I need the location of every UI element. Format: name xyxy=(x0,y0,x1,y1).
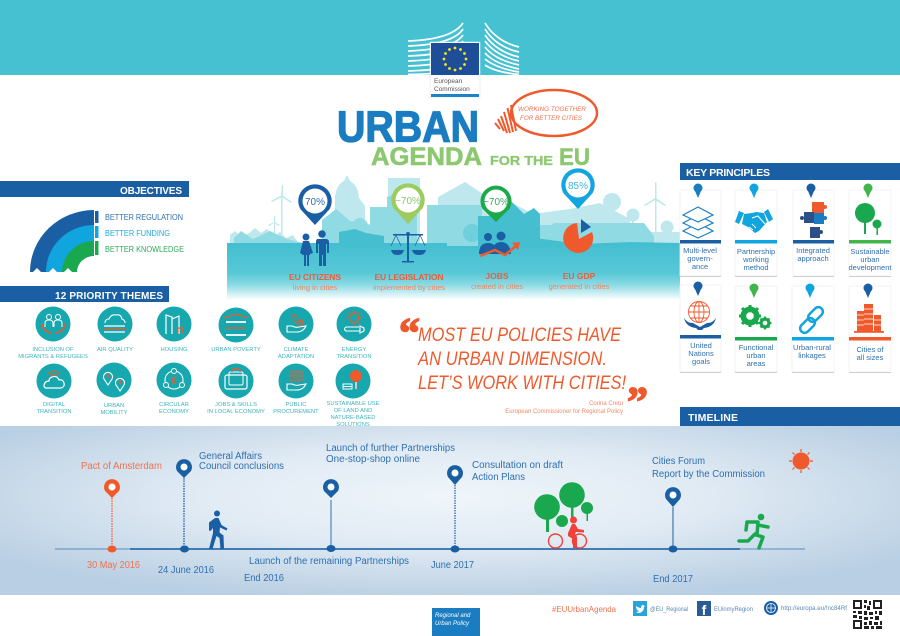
footer: hashtag: #EUUrbanAgenda xyxy=(552,604,616,614)
milestone: further Partnerships: One-stop-shop online xyxy=(326,454,420,465)
milestone: Cities Forum: Cities Forum xyxy=(652,456,705,467)
timeline axis xyxy=(55,548,805,550)
label: TRANSITION xyxy=(336,354,372,360)
label: EU citizens: living in cities xyxy=(293,283,337,292)
label: EU GDP xyxy=(549,271,610,291)
card: multi-level governance xyxy=(680,184,721,276)
footer: website xyxy=(764,601,847,615)
label: ADAPTATION xyxy=(278,354,314,360)
heading: 12 priority themes xyxy=(0,286,169,302)
pin: ~70% legislation: ~70% xyxy=(395,196,421,207)
label: CIRCULAR xyxy=(159,402,189,408)
card: partnership working method xyxy=(735,184,777,276)
label: EU legislation: EU LEGISLATION xyxy=(374,272,444,282)
icon: digital transition xyxy=(36,364,72,398)
title: URBAN xyxy=(337,102,479,152)
attribution xyxy=(505,401,623,415)
card: United Nations goals: United xyxy=(690,341,712,350)
icon: urban poverty xyxy=(218,308,254,342)
card: functional urban areas: Functional xyxy=(739,343,774,352)
European Commission logo: European xyxy=(434,78,463,85)
icon: land use and nature-based solutions xyxy=(336,364,370,398)
chart: objectives rainbow xyxy=(30,210,98,272)
icon: inclusion of migrants and refugees xyxy=(36,306,70,342)
icon: walking person xyxy=(209,510,228,549)
card: United Nations goals xyxy=(680,282,721,372)
European Commission logo: Commission xyxy=(434,86,470,93)
text: objectives list: BETTER FUNDING xyxy=(105,229,170,238)
icon: housing xyxy=(156,306,192,342)
icon: sun xyxy=(789,449,813,473)
label: ECONOMY xyxy=(159,409,189,415)
milestone: Pact of Amsterdam: Pact of Amsterdam xyxy=(81,461,162,472)
icon: jobs and skills xyxy=(218,364,254,398)
card: sustainable urban development: urban xyxy=(860,255,880,264)
card: urban-rural linkages: Urban-rural xyxy=(793,343,831,352)
card: functional urban areas: areas xyxy=(747,359,766,368)
label: ENERGY xyxy=(342,347,366,353)
milestone: further Partnerships: End 2016 xyxy=(244,573,284,584)
icon: circular economy: € xyxy=(171,376,177,387)
card: partnership working method: working xyxy=(742,255,769,264)
callout: working together: FOR BETTER CITIES xyxy=(520,115,582,122)
label: EU citizens: EU CITIZENS xyxy=(289,272,341,282)
card: multi-level governance: Multi-level xyxy=(683,246,717,255)
card: United Nations goals: goals xyxy=(692,357,710,366)
card: cities of all sizes: Cities of xyxy=(856,345,884,354)
label: NATURE-BASED xyxy=(330,415,376,421)
panel: key principles cards xyxy=(680,184,892,372)
pin: 70% citizens xyxy=(298,184,332,225)
panel: timeline background xyxy=(0,426,900,595)
card: functional urban areas: urban xyxy=(746,351,766,360)
label: EU legislation xyxy=(373,272,445,292)
label: EU GDP: generated in cities xyxy=(549,282,610,291)
label: EU legislation: implemented by cities xyxy=(373,283,445,292)
card: cities of all sizes: all sizes xyxy=(857,353,884,362)
card: sustainable urban development: Sustainable xyxy=(850,247,890,256)
icon: closing quote mark: ” xyxy=(627,380,648,426)
milestone: consultation on draft Action Plans: Consultation on draft xyxy=(472,460,563,471)
milestone: Cities Forum xyxy=(652,456,765,585)
footer: website: http://europa.eu/!nc84Rf xyxy=(781,606,847,612)
footer: facebook: EUinmyRegion xyxy=(714,607,753,613)
heading: 12 priority themes: 12 PRIORITY THEMES xyxy=(55,291,163,302)
callout: working together: WORKING TOGETHER xyxy=(518,106,586,113)
card: integrated approach: approach xyxy=(797,254,829,263)
label: jobs: JOBS xyxy=(485,271,509,281)
label: MOBILITY xyxy=(100,410,128,416)
label: EU citizens xyxy=(289,272,341,292)
card: partnership working method: method xyxy=(743,263,769,272)
footer: regional and urban policy box: Regional and xyxy=(435,613,471,619)
milestone: General Affairs Council conclusions: Council conclusions xyxy=(199,461,284,472)
skyline: mid layer xyxy=(234,191,654,250)
icon: Berlaymont building xyxy=(408,23,519,74)
milestone: Pact of Amsterdam xyxy=(81,461,162,571)
icon: opening quote mark: “ xyxy=(399,311,420,357)
heading: timeline: TIMELINE xyxy=(688,412,738,424)
footer: facebook xyxy=(697,601,753,618)
text: objectives list xyxy=(105,213,184,254)
card: partnership working method: Partnership xyxy=(737,247,775,256)
callout: working together xyxy=(495,90,597,136)
icon: energy transition xyxy=(336,306,372,342)
icon: running person xyxy=(739,514,768,548)
icon: trees and cyclist xyxy=(534,482,593,548)
text: objectives list: BETTER KNOWLEDGE xyxy=(105,245,184,254)
label: PUBLIC xyxy=(286,402,306,408)
quote text: AN URBAN DIMENSION. xyxy=(417,349,607,370)
pin: 85% GDP: 85% xyxy=(568,181,588,192)
icon: air quality xyxy=(98,306,132,342)
heading: objectives xyxy=(0,181,189,197)
icon: jobs people and growth arrow xyxy=(479,232,520,256)
attribution: Corina Crețu xyxy=(589,401,623,407)
title: EU xyxy=(559,144,590,171)
heading: key principles xyxy=(680,163,900,180)
panel: city statistics xyxy=(227,168,680,300)
footer: QR code xyxy=(853,600,882,629)
milestone: General Affairs Council conclusions: 24 June 2016 xyxy=(158,565,214,576)
label: TRANSITION xyxy=(36,409,72,415)
milestone: Pact of Amsterdam: 30 May 2016 xyxy=(87,560,140,571)
pin: ~70% jobs: ~70% xyxy=(483,197,509,208)
label: OF LAND AND xyxy=(334,408,372,414)
quote text: MOST EU POLICIES HAVE xyxy=(418,325,621,346)
label: DIGITAL xyxy=(43,402,66,408)
card: cities of all sizes xyxy=(849,284,891,372)
label: HOUSING xyxy=(160,347,188,353)
label: jobs: created in cities xyxy=(471,282,523,291)
card: United Nations goals: Nations xyxy=(688,349,714,358)
skyline: front layer xyxy=(227,200,680,250)
card: multi-level governance: ance xyxy=(692,262,708,271)
icon: urban mobility xyxy=(96,362,132,398)
footer: regional and urban policy box: Urban Policy xyxy=(435,621,470,627)
pin: ~70% jobs xyxy=(480,186,512,222)
label: MIGRANTS & REFUGEES xyxy=(18,354,88,360)
heading: key principles: KEY PRINCIPLES xyxy=(686,167,770,179)
heading: timeline xyxy=(680,407,900,426)
card: functional urban areas xyxy=(735,284,777,372)
icon: GDP pie chart xyxy=(563,219,593,253)
milestone: General Affairs Council conclusions xyxy=(158,451,284,576)
pin: 70% citizens: 70% xyxy=(305,197,325,208)
milestone: Cities Forum: End 2017 xyxy=(653,574,693,585)
card: multi-level governance: govern- xyxy=(687,254,713,263)
attribution: European Commissioner for Regional Policy xyxy=(505,409,623,415)
milestone: consultation on draft Action Plans: Action Plans xyxy=(472,472,525,483)
ground with gradient xyxy=(227,246,680,300)
European Commission logo xyxy=(408,23,519,98)
quote text: LET’S WORK WITH CITIES! xyxy=(418,373,627,394)
footer: twitter: @EU_Regional xyxy=(650,607,688,613)
milestone: Cities Forum: Report by the Commission xyxy=(652,469,765,480)
icon: scales of justice xyxy=(391,232,426,262)
pin: ~70% legislation xyxy=(391,183,425,224)
label: URBAN xyxy=(104,403,124,409)
card: urban-rural linkages xyxy=(792,284,834,372)
text: objectives list: BETTER REGULATION xyxy=(105,213,183,222)
milestone: consultation on draft Action Plans: June 2017 xyxy=(431,560,474,571)
milestone: consultation on draft Action Plans xyxy=(431,460,563,571)
milestone: further Partnerships: Launch of the remaining Partnerships xyxy=(249,556,409,567)
pin: 85% GDP xyxy=(561,168,595,209)
label: SUSTAINABLE USE xyxy=(326,401,380,407)
quote text xyxy=(417,325,627,394)
card: sustainable urban development: development xyxy=(849,263,892,272)
label: IN LOCAL ECONOMY xyxy=(207,409,265,415)
skyline: light layer xyxy=(230,175,680,250)
milestone: further Partnerships: Launch of further Partnerships xyxy=(326,443,455,454)
footer: twitter xyxy=(633,601,688,616)
label: JOBS & SKILLS xyxy=(215,402,257,408)
icon: climate adaptation xyxy=(278,306,314,342)
card: urban-rural linkages: linkages xyxy=(798,351,826,360)
label: URBAN POVERTY xyxy=(211,347,261,353)
card: integrated approach xyxy=(793,184,834,276)
icon: public procurement xyxy=(278,364,314,398)
label: AIR QUALITY xyxy=(97,347,133,353)
footer: facebook: f xyxy=(702,602,707,618)
top teal banner xyxy=(0,0,900,75)
label: jobs xyxy=(471,271,523,291)
label: SOLUTIONS xyxy=(336,422,370,428)
footer: regional and urban policy box xyxy=(432,608,480,636)
label: INCLUSION OF xyxy=(32,347,74,353)
icon: circular economy xyxy=(156,362,192,398)
heading: objectives: OBJECTIVES xyxy=(120,186,182,197)
milestone: further Partnerships xyxy=(244,443,455,584)
label: EU GDP: EU GDP xyxy=(563,271,596,281)
title: FOR THE xyxy=(490,153,553,168)
panel: priority themes xyxy=(18,306,380,428)
milestone: General Affairs Council conclusions: General Affairs xyxy=(199,451,262,462)
label: PROCUREMENT xyxy=(273,409,319,415)
quote xyxy=(399,311,648,426)
title: AGENDA xyxy=(371,143,482,171)
label: CLIMATE xyxy=(284,347,308,353)
icon: citizens xyxy=(300,230,329,266)
card: integrated approach: Integrated xyxy=(796,246,830,255)
title xyxy=(337,102,590,171)
card: sustainable urban development xyxy=(849,184,892,276)
